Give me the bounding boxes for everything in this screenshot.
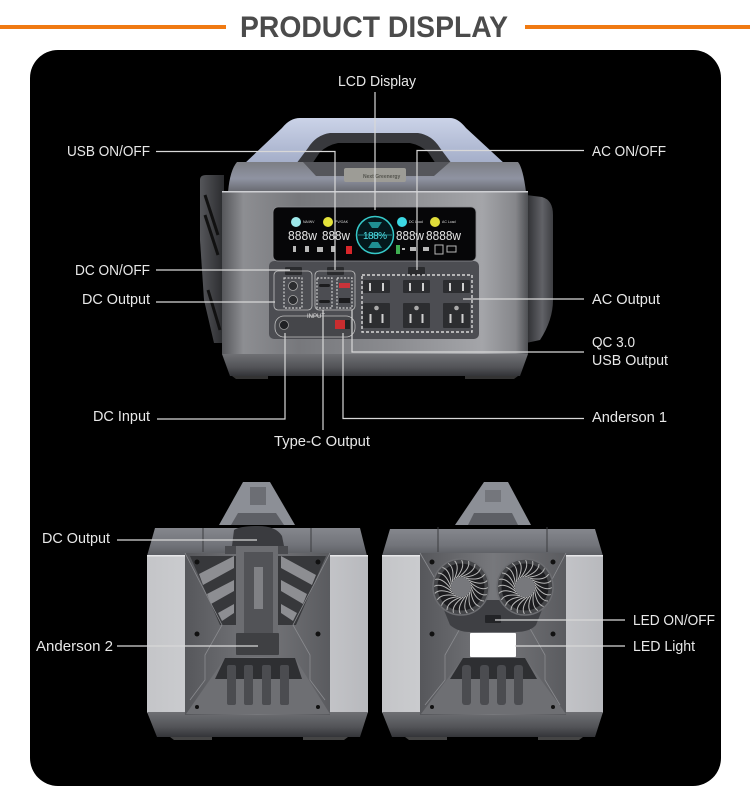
- brand plate: [344, 168, 406, 182]
- callout: QC 3.0 USB Output: QC 3.0: [592, 335, 635, 351]
- base: [222, 354, 528, 376]
- callout: QC 3.0 USB Output: USB Output: [592, 353, 668, 369]
- product: front view of power station: Next Greenergy: [363, 174, 400, 180]
- callout: AC ON/OFF: AC ON/OFF: [592, 144, 666, 160]
- indicators: [291, 217, 456, 227]
- callout: LCD Display: [338, 74, 417, 210]
- LCD readouts: [288, 228, 462, 243]
- indicators: AC Load: [442, 220, 456, 224]
- body: [222, 192, 528, 354]
- title: PRODUCT DISPLAY: [240, 11, 508, 44]
- callout: DC Output side: DC Output: [42, 531, 110, 547]
- top shell: [228, 162, 526, 192]
- input ports: [275, 314, 355, 337]
- side panels: [147, 556, 368, 713]
- callout: USB ON/OFF: USB ON/OFF: [67, 144, 150, 160]
- AC outlets: [362, 275, 472, 332]
- base: [382, 712, 603, 737]
- lower vents: [186, 658, 330, 714]
- DC output ports: [274, 271, 312, 310]
- DC output holster: [232, 526, 284, 546]
- callout: Anderson 2: Anderson 2: [36, 639, 113, 655]
- status icons: [293, 245, 456, 254]
- handle: [244, 118, 505, 164]
- USB ports: [315, 271, 355, 310]
- callout: LCD Display: LCD Display: [338, 74, 417, 90]
- battery gauge: 188%: [363, 231, 387, 242]
- callout: Anderson 1: [343, 333, 667, 426]
- product: right side view: [382, 482, 603, 740]
- callout: Anderson 1: Anderson 1: [592, 410, 667, 426]
- callout: DC Input: [93, 333, 285, 425]
- indicators: PV/OAK: [335, 220, 349, 224]
- title: [0, 11, 750, 44]
- LCD readouts: 888w: [396, 228, 425, 243]
- product: front view of power station: [200, 118, 553, 379]
- callout: LED Light: LED Light: [633, 639, 695, 655]
- callout: Type-C Output: Type-C Output: [274, 434, 370, 450]
- rear plate: [185, 553, 330, 715]
- left side grille: [200, 175, 224, 343]
- product: left side view: [147, 482, 368, 740]
- callout: QC 3.0 USB Output: [352, 310, 668, 369]
- callout: DC Output: DC Output: [82, 292, 150, 308]
- fans: [433, 559, 553, 615]
- callout: DC ON/OFF: DC ON/OFF: [75, 263, 150, 279]
- top handle: [219, 482, 295, 525]
- lower vents: [421, 658, 566, 714]
- Anderson 2 cover: [236, 633, 279, 655]
- side panels: [382, 556, 603, 713]
- indicators: NA/WV: [303, 220, 315, 224]
- switches: [285, 267, 425, 275]
- control panel: [269, 261, 479, 339]
- LCD readouts: 888w: [288, 228, 318, 243]
- callout: AC ON/OFF: [417, 144, 666, 270]
- callout: AC Output: AC Output: [592, 292, 660, 308]
- callout: DC Input: DC Input: [93, 409, 150, 425]
- input ports: INPUT: [307, 314, 325, 320]
- shell: [382, 529, 603, 556]
- base: [147, 712, 368, 737]
- battery gauge: [356, 216, 394, 254]
- callout: LED ON/OFF: LED ON/OFF: [633, 613, 715, 629]
- LED light: [470, 633, 516, 657]
- indicators: DC Load: [409, 220, 423, 224]
- top handle: [455, 482, 531, 525]
- LCD readouts: 888w: [322, 228, 351, 243]
- right side grille: [526, 195, 553, 343]
- LCD readouts: 8888w: [426, 228, 462, 243]
- rear plate: [420, 553, 566, 715]
- LED switch: [485, 615, 501, 623]
- fan housing: [440, 600, 546, 632]
- LCD screen: [273, 207, 476, 261]
- shell: [147, 528, 367, 556]
- callout: USB ON/OFF: [67, 144, 335, 270]
- callout: Type-C Output: [274, 310, 370, 450]
